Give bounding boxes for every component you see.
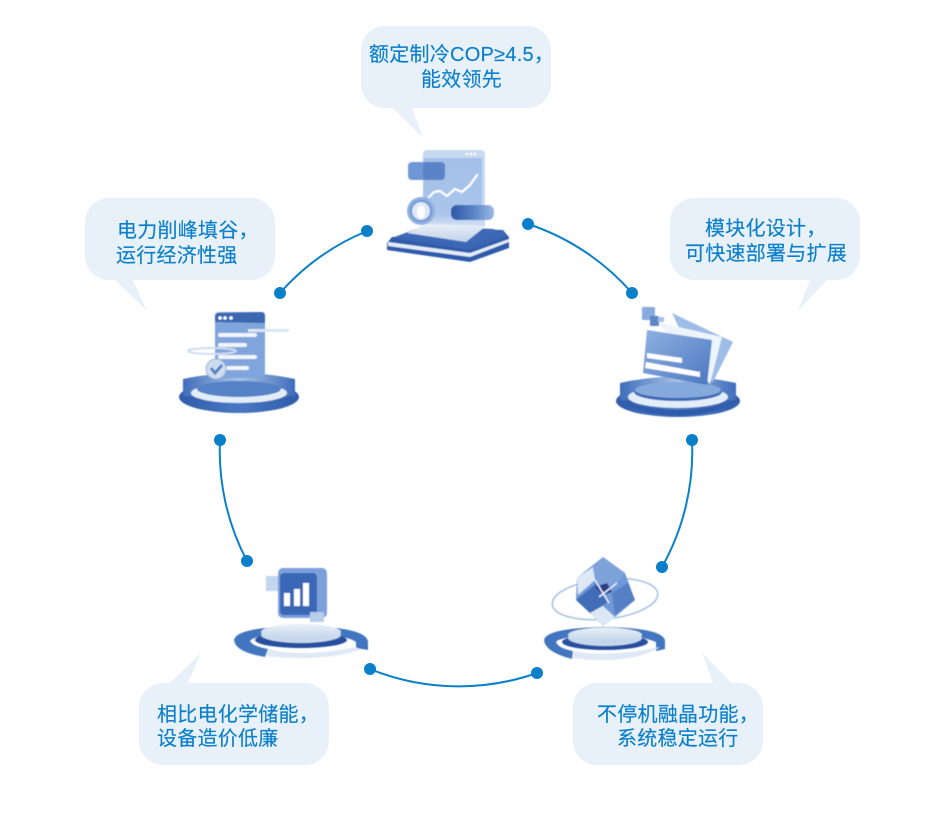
icon: chart panel on square base: [387, 150, 509, 262]
callout: right: 可快速部署与扩展: [685, 242, 847, 265]
callout: bottom right: 系统稳定运行: [617, 727, 738, 750]
icon: document with check on round platform: [179, 312, 299, 413]
callout: right: 模块化设计，: [705, 217, 826, 240]
connector ring: arcs and dots: [214, 218, 698, 686]
icon: crystal cube with orbit on ring platform: [544, 557, 665, 660]
callout: top: 额定制冷COP≥4.5，: [369, 43, 554, 66]
callout: right: [670, 198, 860, 311]
callout: bottom left: 设备造价低廉: [157, 727, 278, 750]
callout: bottom left: [139, 653, 329, 765]
callout: bottom right: [573, 653, 763, 765]
callout: bottom right: 不停机融晶功能，: [597, 703, 759, 726]
callout: top: [361, 26, 554, 138]
callout: left: 电力削峰填谷，: [117, 219, 259, 242]
callout: bottom left: 相比电化学储能，: [157, 703, 319, 726]
callout: left: 运行经济性强: [116, 244, 238, 267]
icon: bar chart tile on ring platform: [234, 568, 368, 658]
callout: left: [85, 198, 275, 311]
icon: folder on round platform: [616, 307, 740, 417]
callout: top: 能效领先: [421, 68, 502, 91]
